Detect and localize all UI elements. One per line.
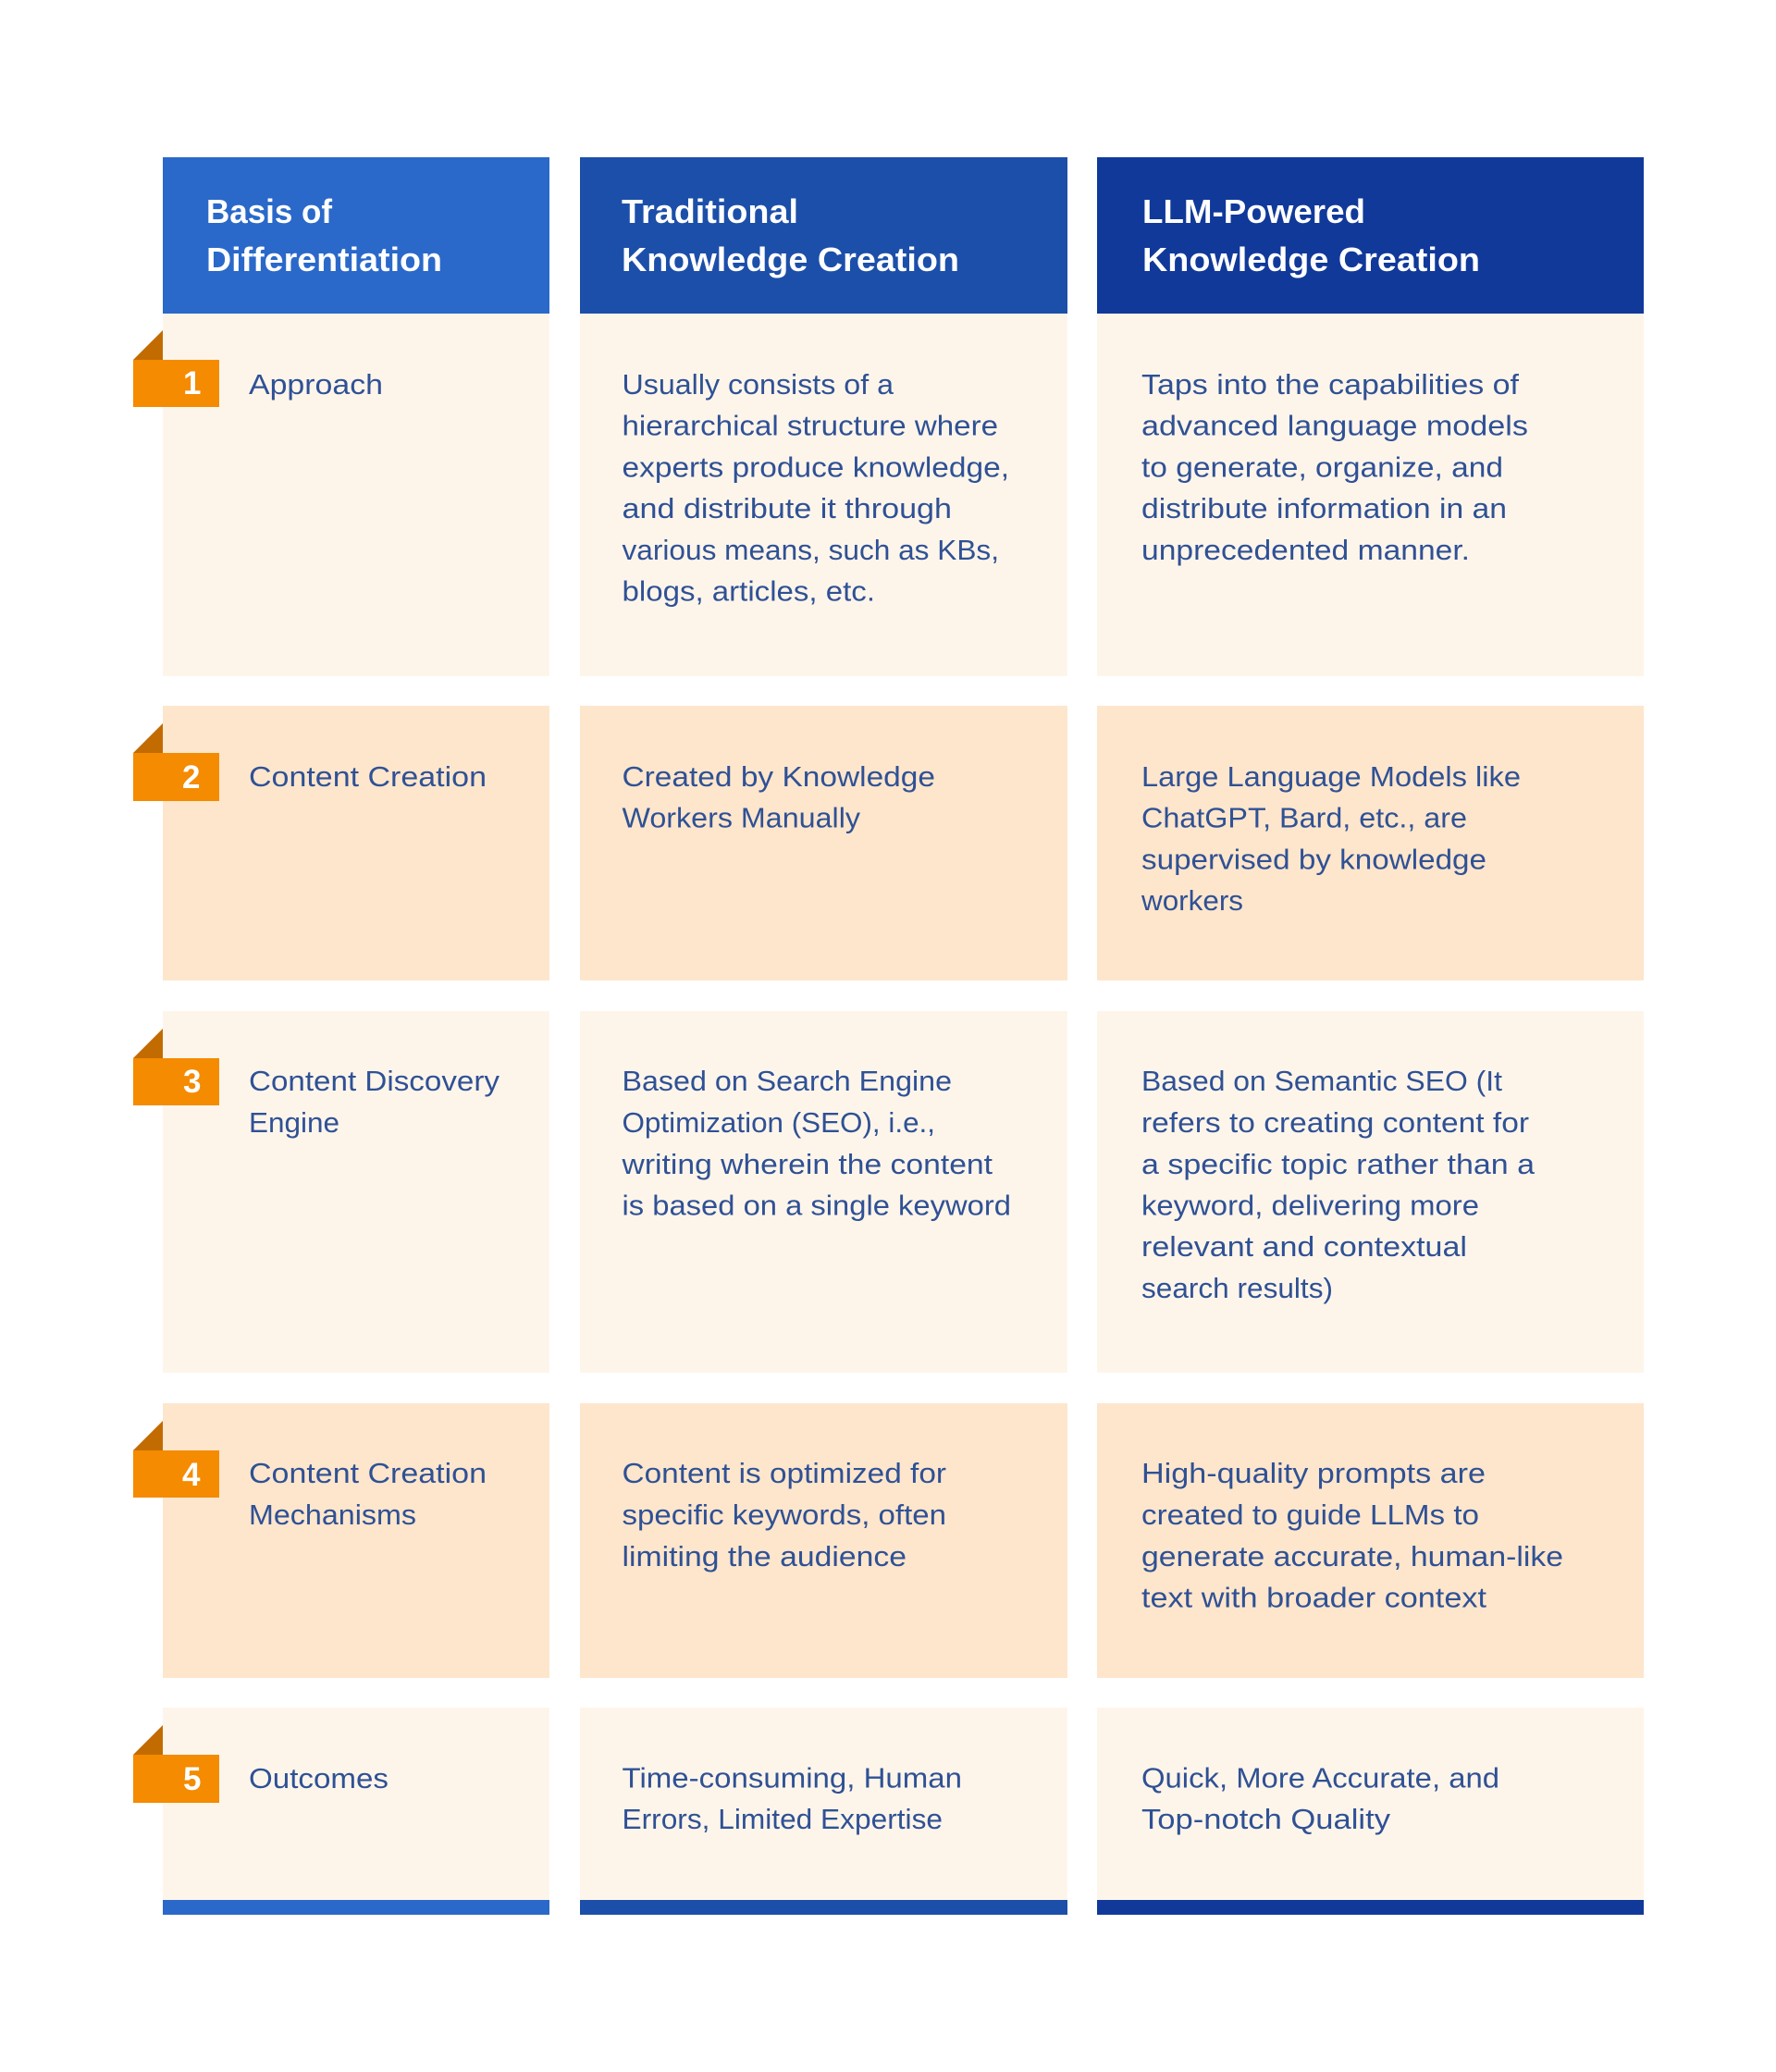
row 1: approach — [133, 314, 1644, 676]
badge 5 — [133, 1725, 219, 1803]
row 3 basis cell — [163, 1011, 549, 1373]
row 5 traditional cell: Errors, Limited Expertise — [622, 1803, 943, 1835]
row 1 basis cell — [163, 314, 549, 676]
row 3 llm cell — [1097, 1011, 1644, 1373]
row 2 basis cell: Content Creation — [249, 760, 487, 793]
badge 3 — [133, 1029, 219, 1105]
row 4 llm cell — [1097, 1403, 1644, 1678]
row 1 traditional cell: and distribute it through — [622, 492, 952, 524]
badge 1 — [133, 330, 219, 407]
row 1 basis cell: Approach — [249, 368, 383, 401]
row 3 traditional cell — [580, 1011, 1067, 1373]
badge 4: 4 — [182, 1457, 201, 1493]
row 1 traditional cell: hierarchical structure where — [622, 409, 998, 442]
row 4 basis cell: Mechanisms — [249, 1498, 416, 1531]
row 2 traditional cell — [580, 706, 1067, 980]
row 1 llm cell: distribute information in an — [1141, 492, 1507, 524]
row 5 llm cell: Top-notch Quality — [1141, 1803, 1391, 1835]
header: traditional knowledge creation: Knowledge Creation — [622, 240, 959, 278]
row 4 llm cell: High-quality prompts are — [1141, 1457, 1486, 1489]
row 2 llm cell: supervised by knowledge — [1141, 844, 1486, 875]
row 2 llm cell: workers — [1141, 884, 1243, 917]
row 3 traditional cell: Based on Search Engine — [622, 1065, 952, 1097]
row 1 llm cell: Taps into the capabilities of — [1141, 368, 1519, 401]
header: basis of differentiation: Basis of — [206, 192, 333, 230]
row 5 traditional cell — [580, 1708, 1067, 1900]
row 4 traditional cell: Content is optimized for — [622, 1457, 946, 1489]
row 1 traditional cell: Usually consists of a — [622, 368, 894, 401]
row 1 traditional cell: experts produce knowledge, — [622, 451, 1009, 483]
row 5 basis cell: Outcomes — [249, 1762, 388, 1794]
row 3 llm cell: refers to creating content for — [1141, 1106, 1529, 1139]
row 5 llm cell: Quick, More Accurate, and — [1141, 1761, 1499, 1794]
row 3 traditional cell: Optimization (SEO), i.e., — [622, 1106, 935, 1139]
row 4: content creation mechanisms — [133, 1403, 1644, 1678]
row 2 llm cell — [1097, 706, 1644, 980]
row 2 llm cell: ChatGPT, Bard, etc., are — [1141, 801, 1467, 834]
row 2 basis cell — [163, 706, 549, 980]
row 3: content discovery engine — [133, 1011, 1644, 1373]
header: traditional knowledge creation: Traditional — [622, 192, 798, 230]
bottom colour bars — [163, 1900, 1644, 1915]
row 1 traditional cell — [580, 314, 1067, 676]
row 1 llm cell: unprecedented manner. — [1141, 534, 1470, 566]
row 4 llm cell: generate accurate, human-like — [1141, 1540, 1563, 1572]
row 3 traditional cell: is based on a single keyword — [622, 1190, 1011, 1221]
row 1 traditional cell: various means, such as KBs, — [622, 534, 999, 566]
row 1 traditional cell: blogs, articles, etc. — [622, 575, 875, 607]
row 5 traditional cell: Time-consuming, Human — [622, 1761, 962, 1794]
row 3 llm cell: relevant and contextual — [1141, 1230, 1467, 1263]
badge 2 — [133, 723, 219, 801]
row 2 llm cell: Large Language Models like — [1141, 760, 1521, 793]
badge 4 — [133, 1421, 219, 1498]
row 2 traditional cell: Created by Knowledge — [622, 760, 935, 793]
row 5 llm cell — [1097, 1708, 1644, 1900]
row 2 traditional cell: Workers Manually — [622, 801, 861, 834]
badge 2: 2 — [182, 759, 200, 796]
row 3 llm cell: Based on Semantic SEO (It — [1141, 1065, 1502, 1097]
badge 5: 5 — [183, 1761, 201, 1797]
row 1 llm cell: to generate, organize, and — [1141, 451, 1503, 483]
header: basis of differentiation — [163, 157, 549, 314]
row 4 basis cell: Content Creation — [249, 1457, 487, 1489]
row 5 basis cell — [163, 1708, 549, 1900]
row 4 llm cell: text with broader context — [1141, 1582, 1486, 1613]
row 1 llm cell: advanced language models — [1141, 409, 1528, 442]
row 5: outcomes — [133, 1708, 1644, 1900]
row 4 traditional cell — [580, 1403, 1067, 1678]
row 3 basis cell: Engine — [249, 1106, 339, 1139]
row 3 basis cell: Content Discovery — [249, 1065, 500, 1097]
header: llm-powered knowledge creation — [1097, 157, 1644, 314]
header row — [163, 157, 1644, 314]
row 3 llm cell: search results) — [1141, 1272, 1333, 1304]
row 4 llm cell: created to guide LLMs to — [1141, 1498, 1479, 1531]
row 3 llm cell: a specific topic rather than a — [1141, 1148, 1536, 1180]
badge 1: 1 — [183, 365, 201, 401]
row 4 traditional cell: specific keywords, often — [622, 1498, 946, 1531]
row 1 llm cell — [1097, 314, 1644, 676]
row 3 traditional cell: writing wherein the content — [621, 1148, 993, 1180]
header: basis of differentiation: Differentiation — [206, 240, 442, 278]
row 4 traditional cell: limiting the audience — [622, 1540, 906, 1572]
row 3 llm cell: keyword, delivering more — [1141, 1190, 1479, 1221]
header: traditional knowledge creation — [580, 157, 1067, 314]
header: llm-powered knowledge creation: LLM-Powered — [1142, 192, 1365, 230]
row 4 basis cell — [163, 1403, 549, 1678]
header: llm-powered knowledge creation: Knowledge Creation — [1142, 240, 1480, 278]
row 2: content creation — [133, 706, 1644, 980]
badge 3: 3 — [183, 1064, 201, 1100]
